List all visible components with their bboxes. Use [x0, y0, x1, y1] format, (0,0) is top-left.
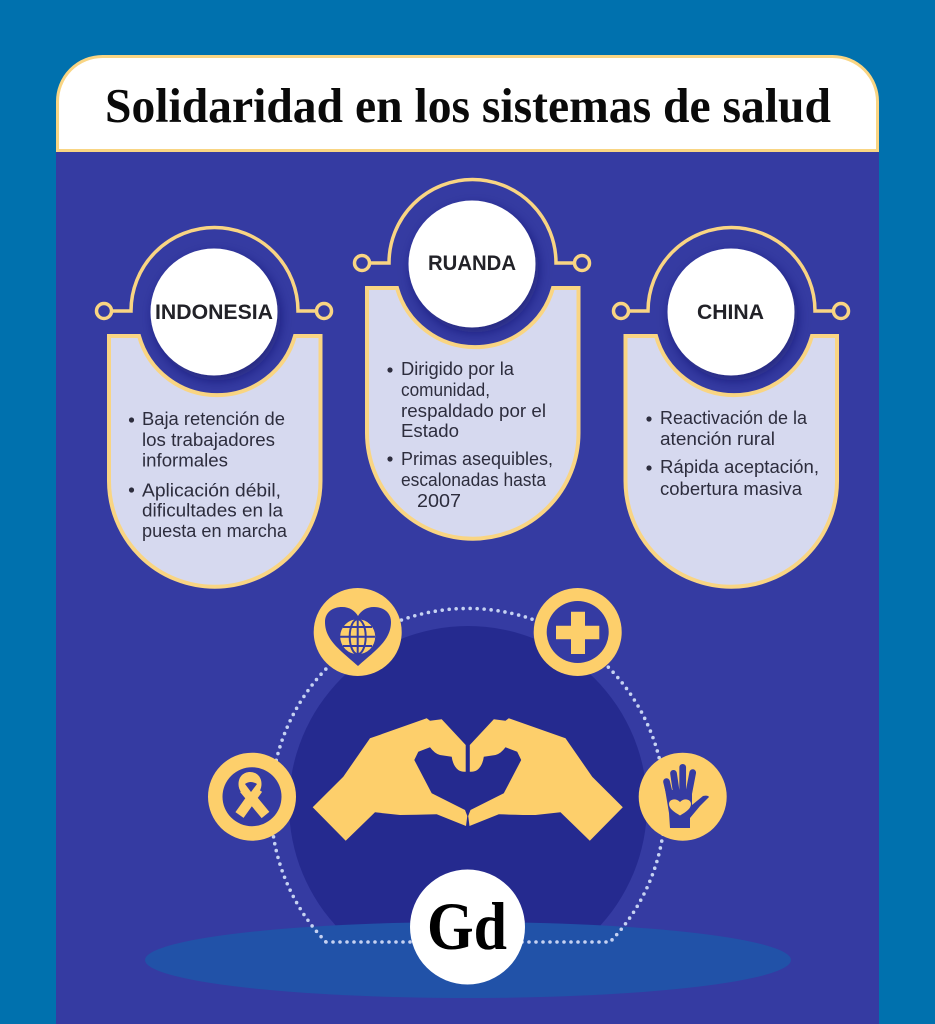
country name: INDONESIA — [155, 301, 273, 324]
title: Solidaridad en los sistemas de salud — [105, 78, 831, 133]
right connector ring — [316, 304, 332, 318]
right connector ring — [574, 256, 590, 270]
logo: Gd — [427, 888, 507, 964]
main panel — [56, 150, 879, 1024]
dark backdrop circle — [289, 626, 647, 984]
bullet list: cobertura masiva — [660, 478, 803, 499]
name circle — [150, 248, 278, 376]
left connector ring — [354, 256, 370, 270]
name circle — [668, 248, 794, 376]
left connector ring — [96, 304, 112, 318]
logo — [410, 870, 525, 984]
left connector ring — [614, 304, 628, 318]
bullet list: Dirigido por la — [401, 358, 515, 379]
dotted ring — [271, 608, 665, 942]
bullet list: Primas asequibles, — [401, 448, 553, 469]
panel: Indonesia — [96, 228, 332, 587]
bullet list: Estado — [401, 420, 459, 441]
bullet list: los trabajadores — [142, 429, 275, 450]
bullet list: dificultades en la — [142, 500, 284, 520]
icon: awareness ribbon — [208, 753, 296, 841]
bullet list: Aplicación débil, — [142, 480, 281, 500]
arch connector — [111, 228, 317, 311]
bullet list — [646, 407, 819, 499]
country name: RUANDA — [428, 252, 516, 275]
bullet list — [387, 358, 553, 511]
bullet list: Rápida aceptación, — [660, 456, 819, 477]
right connector ring — [834, 304, 848, 318]
country name: CHINA — [697, 301, 764, 324]
icon: hand with heart — [639, 753, 727, 841]
panel: Ruanda — [354, 180, 590, 539]
icon: heart with globe — [314, 588, 402, 676]
bullet list: respaldado por el — [401, 400, 546, 421]
icon: medical cross — [534, 588, 622, 676]
icon: heart hands — [313, 718, 623, 841]
bullet list: Baja retención de — [142, 408, 285, 429]
bullet list: 2007 — [417, 490, 461, 511]
name circle — [408, 200, 536, 328]
arch connector — [369, 180, 575, 263]
bullet list: atención rural — [660, 428, 775, 449]
bullet list: comunidad, — [401, 379, 490, 400]
bullet list: informales — [142, 450, 228, 470]
panel: China — [614, 228, 848, 587]
bullet list — [129, 408, 288, 541]
title banner — [57, 56, 878, 150]
ground ellipse — [145, 922, 791, 998]
bullet list: Reactivación de la — [660, 407, 808, 428]
bullet list: puesta en marcha — [142, 520, 288, 541]
arch connector — [628, 228, 834, 311]
bullet list: escalonadas hasta — [401, 469, 547, 490]
